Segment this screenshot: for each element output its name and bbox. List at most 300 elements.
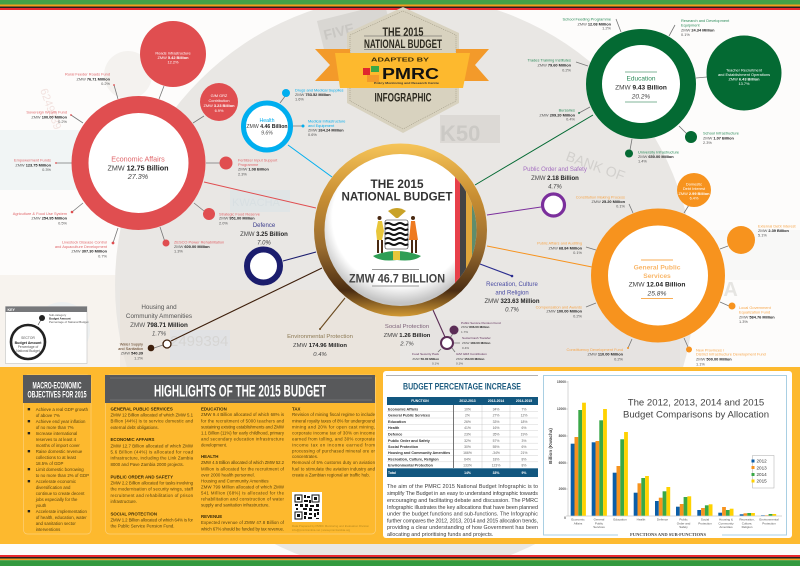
sub-category labels: ZMW 1.08 Billion (238, 167, 269, 172)
panel: housing and community amenities (118, 304, 192, 360)
panel: highlights of the 2015 budget (105, 375, 376, 534)
panel: health (244, 87, 345, 150)
x axis category labels: Services (593, 525, 605, 529)
health label: 9.6% (261, 130, 273, 136)
x axis category labels: Economic (571, 518, 585, 522)
budget percentage table: 6% (522, 426, 526, 430)
general public services leader lines (586, 204, 729, 348)
PMRC tagline: Policy Monitoring and Research Centre (374, 81, 439, 85)
key sub-category text: Sub-category (49, 313, 67, 317)
highlights column 2: and secondary education infrastructure (201, 436, 285, 441)
y axis: 0 (564, 516, 566, 520)
macro objectives list: of health, education, water (36, 515, 87, 520)
bottom yellow section (0, 367, 800, 544)
social protection sub-labels: Social Cash Transfer (462, 336, 491, 340)
key sector text: SECTOR (21, 336, 35, 340)
budget percentage table: 41% (464, 426, 471, 430)
education sub-category labels: 1.2% (602, 26, 612, 31)
roads infrastructure bubble (140, 21, 206, 87)
panel: general public services (536, 173, 797, 366)
highlights column 2: supply and sanitation infrastructure. (201, 502, 270, 507)
general public services sub-category labels: Compensation and Awards (536, 304, 582, 309)
bottom stripe (0, 555, 800, 566)
panel: environmental protection (287, 328, 353, 358)
highlights column 2 (201, 406, 285, 531)
macro objectives list: youth (36, 503, 47, 508)
data source note: Data Prepared by PMRC Monitoring and Evaluation Division (292, 524, 370, 528)
environment marker (319, 328, 321, 330)
x axis category labels: Safety (679, 525, 688, 529)
sub-category labels: ZMW 123.75 Million (15, 162, 51, 167)
roads infrastructure bubble: ZMW 5.42 Billion (158, 55, 188, 60)
sub-category labels: ZESCO Power Rehabilitation (174, 239, 224, 244)
sub-category labels: Strategic Food Reserve (219, 211, 260, 216)
highlights column 2: over 2000 health personnel. (201, 472, 255, 477)
sub-category labels: 0.7% (98, 253, 108, 258)
sub-category labels: ZMW 100.00 Million (31, 114, 67, 119)
social protection sub-labels: G/M GRZ Contribution (456, 352, 487, 356)
connector lines from sectors to central lens (171, 115, 593, 341)
education sub-category labels: Research and Development (681, 18, 730, 23)
sub-category labels: Livestock Disease Control (62, 239, 107, 244)
health sub-category labels: ZMW 264.24 Million (308, 127, 344, 132)
sub-category labels: 0.2% (58, 119, 68, 124)
background collage: K50 (440, 121, 480, 146)
sub-category labels: 0.2% (101, 81, 111, 86)
education sub-category dots (578, 112, 697, 158)
education sub-category labels: School Feeding Programme (563, 16, 611, 21)
general public services label (629, 260, 685, 298)
general public services sub-category labels: ZMW 2.39 Billion (758, 228, 789, 233)
x axis category labels: Public (595, 521, 604, 525)
key header: KEY (8, 308, 15, 312)
macro heading: OBJECTIVES FOR 2015 (28, 390, 86, 400)
highlights column 2: Expected revenue of ZMW 47.8 Billion of (201, 520, 285, 525)
macro bullets (28, 408, 30, 512)
water supply label: ZMW 540.39 (121, 351, 143, 356)
general public services sub-category labels: 0.1% (616, 204, 626, 209)
budget percentage table: 55% (493, 445, 499, 449)
highlights column 3: Revision of mining fiscal regime to include (292, 412, 376, 417)
budget percentage table: Health (388, 426, 400, 430)
macro objectives list: Raise domestic revenue (36, 449, 83, 454)
x axis category labels: Health (637, 518, 646, 522)
domestic debt bubble: ZMW 2.99 Billion (679, 191, 709, 196)
education ring (594, 37, 688, 131)
general public services sub-category labels: 0.1% (573, 250, 583, 255)
x axis category labels: Amenities (719, 525, 733, 529)
sub-category labels: Rural Feeder Roads Fund (65, 71, 110, 76)
panel: budget comparison bar chart (544, 376, 786, 537)
GRZ contribution bubble: 6.9% (215, 108, 224, 113)
education sub-category labels: 0.2% (562, 67, 572, 72)
budget percentage table: 14% (464, 471, 471, 475)
teacher recruitment bubble: and Establishment Operations (718, 72, 770, 77)
general public services label: Services (643, 273, 671, 280)
defence label: 7.0% (257, 240, 271, 246)
budget percentage table: 32% (464, 439, 471, 443)
general public services sub-category labels: 0.2% (573, 313, 583, 318)
highlights column 2: ZMW 4.5 Billion allocated of which ZMW 52.2 (201, 460, 285, 465)
water supply label: Water Supply (120, 342, 143, 347)
series 2015 bars (582, 403, 776, 516)
macro objectives list: collections to at least (36, 455, 77, 460)
zambian coat of arms (373, 208, 421, 260)
lens title: THE 2015 (370, 177, 424, 191)
budget percentage table: 33% (493, 471, 499, 475)
highlights column 3: concentrates. (292, 454, 318, 459)
table heading: BUDGET PERCENTAGE INCREASE (403, 382, 521, 392)
highlights column 1: ECONOMIC AFFAIRS (110, 437, 155, 442)
budget percentage table: 133% (463, 464, 472, 468)
general public services ring (600, 217, 716, 334)
summary paragraph: under the budget functions and sub-functions. The Infographic (387, 512, 538, 518)
recreation label: ZMW 323.63 Million (484, 299, 540, 305)
education sub-category labels: ZMW 79.60 Million (537, 63, 571, 68)
public order label: ZMW 2.18 Billion (531, 176, 579, 182)
macro objectives list: Accelerate economic (36, 479, 77, 484)
background collage: KWACHA (232, 197, 281, 209)
recreation marker (511, 275, 513, 277)
health label: Health (260, 118, 275, 124)
highlights column 1: SOCIAL PROTECTION (110, 511, 157, 516)
highlights column 2: rehabilitation and construction of water (201, 496, 285, 501)
PMRC wordmark: PMRC (382, 66, 440, 83)
summary paragraph: encouraging and facilitating debate and discussion. The PMRC (387, 498, 538, 504)
teacher recruitment bubble: 13.7% (738, 81, 750, 86)
highlights column 3: TAX (292, 406, 301, 411)
highlights column 3: create a Zambian regional air traffic hub. (292, 472, 370, 477)
teacher recruitment bubble: Teacher Recruitment (726, 67, 763, 72)
highlights column 2: development. (201, 443, 227, 448)
chart legend: 2013 (756, 465, 767, 470)
highlights column 1: ZMW 12.7 Billion allocated of which ZMW (110, 443, 194, 448)
GRZ contribution bubble: G/M GRZ (211, 93, 228, 98)
general public services sub-category dots (627, 226, 755, 352)
health sub-category labels (295, 87, 345, 137)
panel: defence (240, 223, 288, 282)
macro objectives list: jobs especially for the (35, 497, 78, 502)
macro heading: MACRO-ECONOMIC (32, 380, 82, 390)
ribbon banner (335, 53, 470, 88)
highlights column 1: the modernisation of security wings, staff (110, 487, 194, 492)
education sub-category labels: School Infrastructure (703, 130, 739, 135)
economic affairs ring (80, 104, 197, 222)
sub-category labels: 2.0% (219, 220, 228, 225)
general public services sub-category labels (536, 195, 797, 366)
GRZ contribution bubble (200, 83, 238, 121)
x axis category labels: Social (701, 518, 709, 522)
chart legend (752, 456, 774, 488)
x axis title: FUNCTIONS AND SUB-FUNCTIONS (630, 532, 706, 537)
y axis: 6000 (559, 461, 566, 465)
budget percentage table: 16% (493, 426, 499, 430)
education leader lines (576, 19, 707, 150)
social protection sub-labels: 0.1% (432, 361, 439, 365)
sub-category labels: and Aquaculture Development (55, 244, 108, 249)
adapted by text: ADAPTED BY (371, 58, 429, 64)
housing label: Housing and (141, 304, 177, 311)
summary paragraph: providing a clear understanding of how Government has been (387, 525, 538, 531)
highlights column 1: Billion (44%) is to service domestic and (110, 419, 194, 424)
x axis category labels: Public (679, 518, 688, 522)
recreation label: Recreation, Culture (486, 282, 539, 288)
budget percentage table: 10% (464, 407, 471, 411)
public order label: 4.7% (548, 184, 562, 190)
panel: education (527, 16, 782, 164)
summary paragraph: simplify The Budget in an easy to understand infographic towards (387, 491, 538, 497)
budget percentage table: Recreation, Culture, Religion (388, 457, 439, 461)
key sector text: Budget Amount (15, 341, 42, 345)
y axis: 8000 (559, 434, 566, 438)
highlights column 2: EDUCATION (201, 406, 227, 411)
sub-category labels: Empowerment Funds (14, 157, 51, 162)
social protection sub-labels (412, 321, 501, 365)
x axis category labels: Community (718, 521, 734, 525)
general public services sub-category labels: Local Government (739, 305, 772, 310)
chart title: The 2012, 2013, 2014 and 2015 (628, 398, 764, 408)
highlights column 3: fuel to stimulate the aviation industry and (292, 466, 376, 471)
budget percentage table: 57% (493, 439, 499, 443)
y axis: 12000 (557, 407, 566, 411)
education label (615, 72, 667, 102)
budget percentage table: 2% (465, 414, 470, 418)
general public services sub-category labels: ZMW 68.84 Million (548, 245, 582, 250)
general public services sub-category labels: Public Affairs and Auditing (537, 240, 582, 245)
public order ring (542, 194, 564, 216)
key sub-category text: Budget Amount (49, 316, 71, 320)
lens title: NATIONAL BUDGET (342, 190, 453, 204)
budget percentage table: 18% (493, 457, 499, 461)
y axis: 2000 (559, 487, 566, 491)
flag bands (455, 177, 476, 283)
highlights column 2: ZMW 9.4 Billion allocated of which 68% is (201, 412, 285, 417)
health sub-category labels: ZMW 753.52 Million (295, 92, 331, 97)
budget percentage table: 123% (492, 464, 500, 468)
series 2014 bars (578, 410, 772, 516)
x axis category labels: Religion (742, 525, 753, 529)
health sub-category labels: Medical Infrastructure (308, 118, 345, 123)
total budget: ZMW 46.7 BILLION (349, 274, 445, 286)
key sector text: Percentage of (18, 345, 38, 349)
environment label: Environmental Protection (287, 334, 353, 340)
budget percentage table: 8% (522, 457, 526, 461)
general public services sub-category labels: ZMW 584.76 Million (739, 314, 775, 319)
general public services sub-category labels: Constituency Development Fund (567, 347, 623, 352)
summary paragraph: Infographic illustrates the key allocations that have been planned (387, 505, 538, 511)
defence ring (247, 250, 280, 282)
domestic debt bubble: Debt Interest (683, 186, 706, 191)
summary paragraph: The aim of the PMRC 2015 National Budget Infographic is to (387, 484, 538, 490)
education sub-category labels: 0.4% (566, 117, 576, 122)
social protection label: 2.7% (399, 342, 414, 348)
economic affairs label: 27.3% (127, 172, 149, 181)
panel: recreation culture and religion (484, 275, 540, 314)
highlights column 1: infrastructure, including the Link Zambia (110, 456, 194, 461)
budget percentage table: Economic Affairs (388, 407, 418, 411)
x axis category labels: Affairs (574, 521, 583, 525)
social protection markers (438, 326, 460, 352)
budget percentage table: 9% (522, 471, 526, 475)
chart legend: 2014 (756, 472, 767, 477)
health sub-category labels: 1.6% (295, 97, 304, 102)
highlights column 1: external debt obligations. (110, 425, 159, 430)
health sub-category labels: 0.6% (308, 132, 317, 137)
education sub-category labels (527, 16, 739, 164)
QR code (292, 492, 322, 522)
budget percentage table: 3% (522, 439, 526, 443)
x axis category labels: Recreation, (739, 518, 755, 522)
budget percentage table: 27% (493, 414, 499, 418)
budget percentage table: 12% (521, 414, 527, 418)
budget percentage table: 7% (522, 407, 526, 411)
highlights column 2: for the recruitment of 5000 teachers and (201, 418, 285, 423)
x axis category labels: Protection (762, 521, 776, 525)
x axis category labels: General (594, 518, 605, 522)
highlights column 2: which 67% should be funded by tax revenue. (201, 526, 284, 531)
macro objectives list: 18.5% of GDP (36, 461, 64, 466)
education label: ZMW 9.43 Billion (615, 84, 667, 92)
general public services sub-category labels: Constitution Making Process (576, 195, 625, 200)
education sub-category labels: Trades Training Institutes (527, 58, 571, 63)
education sub-category labels: Bursaries (559, 107, 575, 112)
health sub-category labels: and Equipment (308, 123, 335, 128)
background collage: 2499394 (170, 333, 228, 350)
x axis category labels: Housing & (719, 518, 733, 522)
health ring (244, 103, 290, 150)
budget percentage table: Total (388, 471, 396, 475)
background collage: BANK OF (564, 148, 627, 184)
badge heading: NATIONAL BUDGET (364, 37, 442, 51)
general public services sub-category labels: 1.1% (696, 361, 705, 366)
lens title (342, 177, 453, 204)
key sub-category text: Percentage of National Budget (49, 320, 89, 324)
public order label: Public Order and Safety (523, 167, 587, 173)
environment label: ZMW 174.96 Million (293, 343, 347, 349)
highlights column 2: Housing and Community Amenities (201, 478, 269, 483)
education sub-category labels: 0.1% (681, 32, 690, 37)
highlights column 2: 541 Million (68%) is allocated for the (201, 490, 285, 495)
budget percentage table: 2013-2014 (488, 399, 504, 403)
highlights column 1: ZMW 12 Billion allocated of which ZMW 5.1 (110, 412, 194, 417)
sub-category labels: 2.3% (238, 171, 247, 176)
recreation label: 0.7% (505, 308, 519, 314)
x axis category labels: Order and (677, 521, 691, 525)
roads infrastructure bubble: Roads Infrastructure (155, 50, 191, 56)
highlights column 3 (292, 406, 376, 477)
macro objectives list: months of import cover (36, 443, 80, 448)
badge heading (364, 25, 442, 104)
macro objectives list: Achieve a real GDP growth (36, 407, 89, 412)
domestic debt bubble: 6.4% (690, 196, 699, 201)
key sector ring (11, 315, 45, 359)
GRZ contribution bubble: Contribution (209, 98, 229, 103)
general public services sub-category labels: District Infrastructure Development Fund (696, 352, 766, 357)
macro objectives list: Accelerate implementation (36, 509, 87, 514)
health sub-category dots (282, 89, 304, 128)
domestic debt bubble (677, 173, 711, 207)
highlights column 2: sustaining existing establishments and ZMW (201, 424, 285, 429)
budget percentage table: -34% (492, 451, 500, 455)
key sector text: National Budget (16, 349, 40, 353)
budget percentage table: 19% (521, 432, 527, 436)
education sub-category labels: 2.3% (703, 140, 712, 145)
macro objectives list: of no more than 7% (36, 425, 74, 430)
lens face (324, 154, 476, 306)
highlights column 3: processing of purchased mineral ore or (292, 449, 376, 454)
budget percentage table: 18% (521, 420, 527, 424)
highlights column 1: 8000 and Pave Zambia 2000 projects. (110, 462, 184, 467)
macro objectives list: diversification and (36, 485, 71, 490)
hexagon (347, 7, 459, 133)
panel: macro-economic objectives (23, 375, 91, 534)
highlights column 3: earned from tolling, and 30% corporate (292, 436, 376, 441)
social protection sub-labels: ZMW 806.00 Million (461, 325, 489, 329)
macro objectives list: to no more than 2% of GDP (36, 473, 89, 478)
education sub-category labels: Equipment (681, 23, 701, 28)
data source note: info@pmrczambia.net | www.pmrczambia.org (292, 528, 351, 532)
budget percentage table: 26% (464, 420, 471, 424)
social protection sub-labels: ZMW 50.00 Million (412, 357, 439, 361)
general public services label: General Public (634, 264, 681, 272)
highlights column 1: GENERAL PUBLIC SERVICES (110, 406, 173, 411)
sub-category labels: ZMW 307.30 Million (71, 248, 107, 253)
general public services sub-category labels: Equalization Fund (739, 310, 770, 315)
education sub-category labels: ZMW 12.08 Million (577, 21, 611, 26)
ribbon tails (315, 49, 489, 81)
x axis category labels: Environmental (759, 518, 779, 522)
social protection sub-labels: Public Service Pension Fund (461, 321, 501, 325)
central lens (314, 144, 487, 316)
series 2012 bars (571, 442, 765, 516)
general public services sub-category labels: ZMW 500.00 Million (696, 357, 732, 362)
highlights column 1: PUBLIC ORDER AND SAFETY (110, 474, 173, 479)
series 2013 bars (574, 437, 769, 516)
sub-category labels: 1.3% (174, 248, 183, 253)
budget percentage table: 2014-2015 (516, 399, 532, 403)
budget percentage table (387, 397, 538, 477)
general public services label: 25.8% (647, 290, 667, 298)
water supply label: 1.2% (134, 355, 144, 360)
budget percentage table: 6% (522, 445, 526, 449)
white panel: table, summary and chart (383, 371, 792, 538)
panel: economic affairs (13, 21, 278, 258)
sub-category labels: Sovereign Wealth Fund (26, 109, 67, 114)
environment label: 0.4% (313, 352, 327, 358)
highlights column 2: ZMW 799 Million allocated of which ZMW (201, 484, 285, 489)
budget percentage table: Education (388, 420, 407, 424)
sub-category labels: Fertilizer Input Support (238, 157, 278, 162)
highlights column 1: recruitment and rehabilitation of prison (110, 493, 194, 498)
badge heading: INFOGRAPHIC (374, 90, 432, 104)
background collage: FIVE (322, 20, 356, 43)
panel: public order and safety (523, 167, 587, 216)
background collage: 6249939 (37, 87, 63, 131)
highlights column 1: ZMW 1.2 Billion allocated of which 64% is for (110, 517, 194, 522)
macro objectives list: of above 7% (36, 413, 60, 418)
macro objectives list: reserves to at least 4 (36, 437, 77, 442)
defence label: ZMW 3.25 Billion (240, 232, 288, 238)
gold ring (314, 144, 487, 316)
highlights column 3: mining and 20% for open cast mining, (292, 424, 375, 429)
economic affairs label: Economic Affairs (111, 154, 165, 164)
education sub-category labels: ZMW 1.07 Billion (703, 135, 734, 140)
GRZ contribution bubble: ZMW 3.23 Billion (204, 103, 234, 108)
health label: ZMW 4.46 Billion (246, 124, 288, 130)
recreation label: and Religion (495, 290, 529, 296)
budget percentage table: Defence (388, 432, 402, 436)
general public services sub-category labels: ZMW 25.20 Million (591, 199, 625, 204)
